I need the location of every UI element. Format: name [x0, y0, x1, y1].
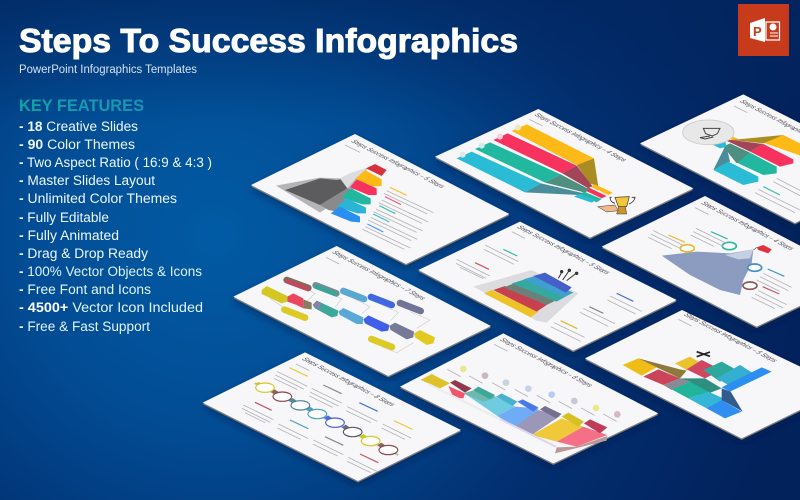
title: Steps To Success Infographics	[19, 22, 518, 59]
feature list: - Free Font and Icons	[19, 282, 151, 297]
slide: stair 5 steps: Steps Success Infographics – 5 Steps	[515, 225, 612, 275]
feature list: - Free & Fast Support	[19, 319, 150, 334]
feature list: - Fully Animated	[19, 228, 119, 243]
feature list: - Fully Editable	[19, 210, 109, 225]
slide: descending bars 8 steps: Steps Success Infographics – 8 Steps	[498, 337, 595, 388]
slide: stair blocks 5 steps: Steps Success Infographics – 5 Steps	[682, 312, 780, 363]
feature list: - 18 Creative Slides	[19, 119, 138, 134]
feature list: - 4500+ Vector Icon Included	[19, 300, 203, 315]
slide: funnel 4 steps: Steps Success Infographics – 4 Steps	[532, 112, 629, 163]
slide: chain 8 steps	[203, 352, 461, 481]
slide: chain 8 steps: Steps Success Infographics – 8 Steps	[300, 357, 397, 407]
feature list: - Drag & Drop Ready	[19, 246, 148, 261]
icon: PowerPoint logo	[738, 4, 789, 56]
slide: trophy arrows	[640, 94, 800, 223]
feature list: - Unlimited Color Themes	[19, 191, 177, 206]
slide: process 7 steps	[233, 246, 491, 376]
slide: stair 5 steps	[418, 222, 677, 351]
slide: mountain 5 steps	[251, 134, 509, 264]
subtitle: PowerPoint Infographics Templates	[19, 64, 197, 76]
slide: mountain 5 steps: Steps Success Infographics – 5 Steps	[349, 139, 446, 189]
slide: funnel 4 steps	[435, 109, 693, 238]
feature list: - 90 Color Themes	[19, 137, 135, 152]
slide: mountain 4 steps	[602, 196, 800, 327]
slide: descending bars 8 steps	[400, 333, 658, 463]
heading: key features: KEY FEATURES	[19, 96, 144, 115]
slide: process 7 steps: Steps Success Infographics – 7 Steps	[330, 250, 428, 301]
feature list	[19, 119, 212, 334]
slide: stair blocks 5 steps	[585, 310, 800, 438]
feature list: - Master Slides Layout	[19, 173, 155, 188]
icon: PowerPoint logo: P	[753, 24, 762, 39]
feature list: - 100% Vector Objects & Icons	[19, 264, 202, 279]
feature list: - Two Aspect Ratio ( 16:9 & 4:3 )	[19, 155, 212, 170]
